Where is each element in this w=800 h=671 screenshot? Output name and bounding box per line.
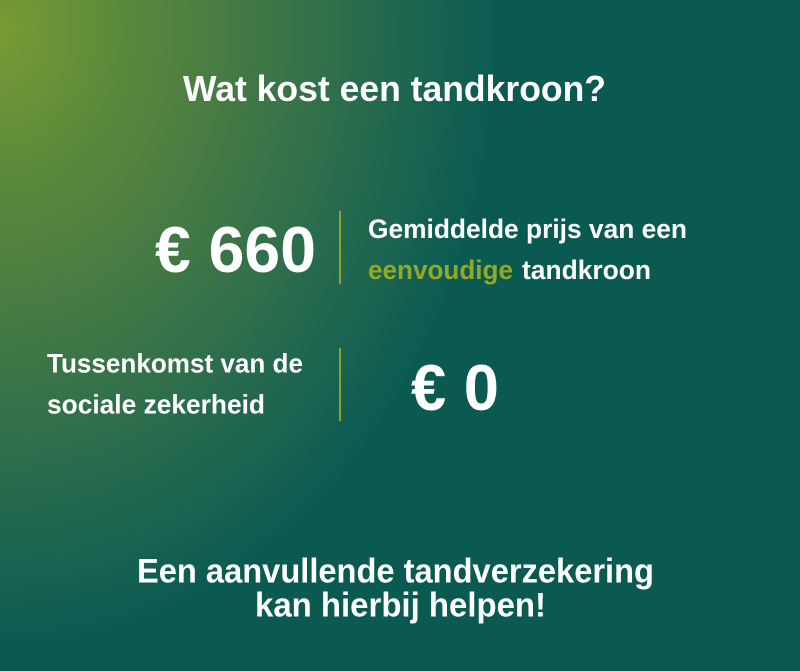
text: social security contribution: Tussenkomst van de	[47, 348, 303, 378]
text: average price description: tandkroon	[522, 255, 651, 285]
price: social security amount: € 0	[411, 351, 499, 424]
text: social security contribution: sociale zekerheid	[47, 390, 265, 420]
price: average crown cost: € 660	[155, 213, 316, 286]
closing message	[137, 552, 654, 624]
closing message: kan hierbij helpen!	[255, 586, 546, 624]
text: average price description: eenvoudige	[368, 255, 513, 285]
text: social security contribution	[47, 348, 303, 420]
divider: bottom row	[339, 348, 341, 421]
title: Wat kost een tandkroon?	[183, 68, 606, 109]
text: average price description: Gemiddelde prijs van een	[368, 214, 687, 244]
text: average price description	[368, 214, 687, 285]
closing message: Een aanvullende tandverzekering	[137, 552, 654, 590]
divider: top row	[339, 211, 341, 284]
